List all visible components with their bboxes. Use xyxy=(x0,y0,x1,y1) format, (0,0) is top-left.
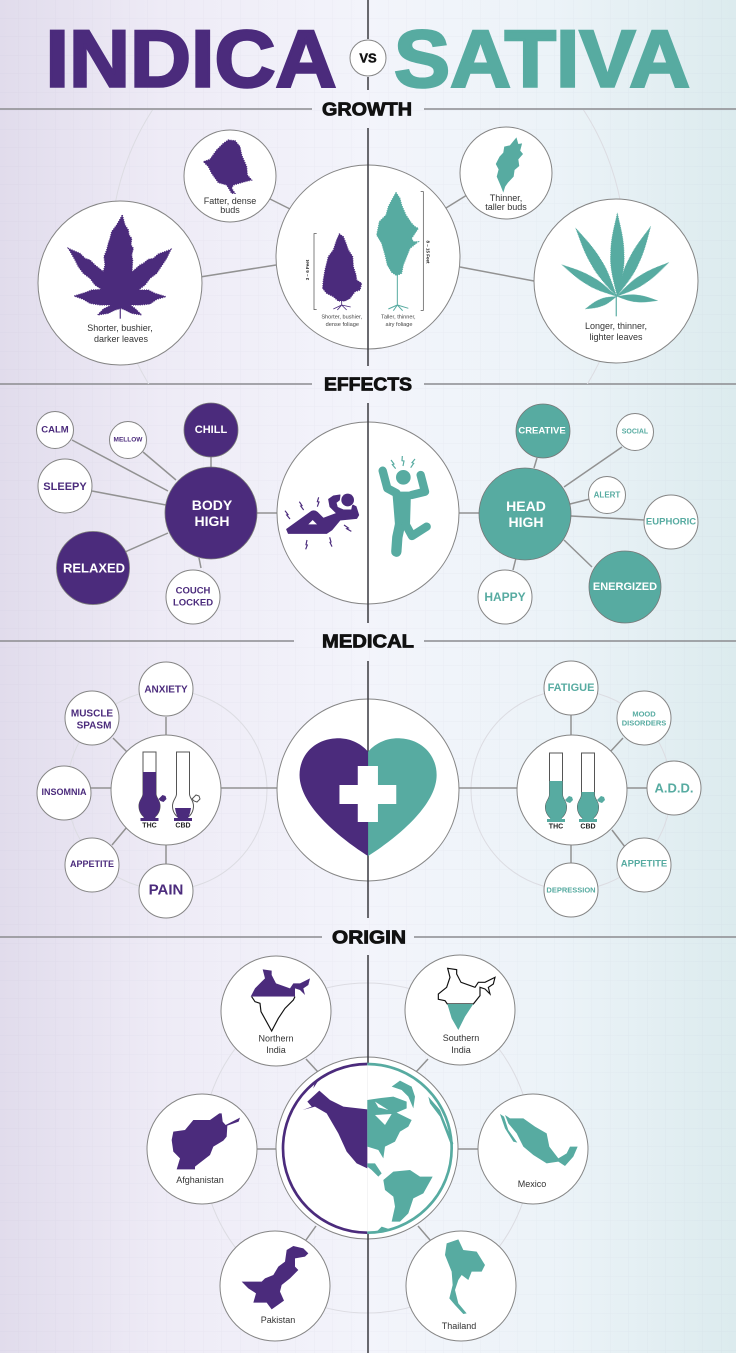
caption: Thailand xyxy=(442,1321,476,1331)
caption: thin buds: Thinner, xyxy=(490,193,522,203)
icon: sativa THC bong xyxy=(546,753,573,822)
caption: sativa leaves: Longer, thinner, xyxy=(585,321,647,331)
caption: Pakistan xyxy=(261,1315,295,1325)
label: CBD: CBD xyxy=(580,824,596,830)
node: mood disorders: MOOD xyxy=(632,710,656,718)
caption: thin buds xyxy=(485,193,527,212)
node: couch locked: LOCKED xyxy=(173,598,213,608)
icon: sativa CBD bong xyxy=(578,753,605,822)
node: social: SOCIAL xyxy=(622,428,649,436)
node: insomnia xyxy=(37,766,91,820)
node: relaxed xyxy=(56,532,130,604)
node: energized: ENERGIZED xyxy=(593,581,657,593)
connector lines: effects xyxy=(72,440,644,570)
icon: pakistan map xyxy=(242,1246,308,1309)
node: creative xyxy=(516,404,570,458)
panel: medical center circle xyxy=(277,699,459,881)
panel: body high cluster xyxy=(36,403,257,624)
node: muscle spasm: SPASM xyxy=(77,720,111,732)
heading: growth: GROWTH xyxy=(322,98,412,120)
icon: sativa plant: 8 – 15 Feet xyxy=(426,240,430,264)
icon: afghanistan map xyxy=(172,1113,240,1169)
node: social xyxy=(616,414,654,450)
caption: thin buds: taller buds xyxy=(485,202,527,212)
node: anxiety xyxy=(139,662,193,716)
node: add xyxy=(647,761,701,815)
vs badge xyxy=(350,40,386,76)
node: happy: HAPPY xyxy=(484,590,526,604)
icon: southern india map xyxy=(438,968,495,1030)
caption: indica leaves: Shorter, bushier, xyxy=(87,323,153,333)
icon: sativa leaf xyxy=(560,213,671,316)
icon: globe xyxy=(283,1064,453,1233)
icon: mexico map xyxy=(500,1114,578,1166)
node: pain: PAIN xyxy=(149,882,183,898)
node: head high: HIGH xyxy=(508,514,544,530)
icon: indica plant: dense foliage xyxy=(326,322,359,328)
heading: effects: EFFECTS xyxy=(324,374,412,394)
node: appetite xyxy=(65,838,119,892)
node: mood disorders xyxy=(617,691,671,745)
node: mellow: MELLOW xyxy=(114,436,143,444)
title: SATIVA: SATIVA xyxy=(394,14,690,104)
node: couch locked xyxy=(166,570,220,624)
icon: indica plant: Shorter, bushier, xyxy=(321,315,363,321)
heading: origin: ORIGIN xyxy=(332,926,406,948)
connector lines: growth xyxy=(200,195,534,281)
icon: heart with cross xyxy=(300,738,437,856)
node: sleepy xyxy=(38,459,92,513)
label: CBD: CBD xyxy=(175,822,191,830)
node: depression xyxy=(544,863,598,917)
panel: origin globe outer circle xyxy=(276,1057,458,1239)
panel: pakistan xyxy=(220,1231,330,1341)
center vertical line xyxy=(367,0,369,1353)
node: insomnia: INSOMNIA xyxy=(42,787,87,797)
node: chill: CHILL xyxy=(195,424,227,436)
hub: indica bongs xyxy=(111,735,221,845)
vs badge: VS xyxy=(359,50,377,66)
panel: indica medical cluster xyxy=(37,662,221,918)
node: energized xyxy=(589,551,661,623)
section divider lines xyxy=(0,109,736,937)
node: appetite xyxy=(617,838,671,892)
icon: thailand map xyxy=(445,1239,485,1314)
icon: northern india map xyxy=(251,969,310,1031)
panel: southern india xyxy=(405,955,515,1065)
icon: indica THC bong xyxy=(139,752,166,821)
panel: afghanistan xyxy=(147,1094,257,1204)
icon: sativa plant: airy foliage xyxy=(385,322,413,328)
connector lines: medical xyxy=(91,715,647,865)
caption: India xyxy=(451,1045,471,1055)
caption: Southern xyxy=(443,1033,479,1043)
node: pain xyxy=(139,864,193,918)
panel: thailand xyxy=(406,1231,516,1341)
panel: effects center circle xyxy=(277,422,459,604)
title: INDICA: INDICA xyxy=(46,14,336,104)
node: alert xyxy=(588,476,626,514)
panel: indica buds xyxy=(184,130,276,222)
label: THC: THC xyxy=(142,822,157,830)
node: mood disorders: DISORDERS xyxy=(622,718,666,728)
icon: fat bud xyxy=(203,140,252,193)
icon: person lying down xyxy=(285,493,359,549)
caption: Mexico xyxy=(518,1179,546,1189)
node: euphoric xyxy=(644,495,698,549)
caption: Afghanistan xyxy=(176,1175,224,1185)
icon: indica plant xyxy=(305,234,363,328)
caption xyxy=(258,1034,294,1055)
icon: indica leaf xyxy=(68,215,171,319)
node: chill xyxy=(184,403,238,457)
caption xyxy=(443,1033,479,1055)
icon: person energized xyxy=(383,456,427,552)
faint orbit rings xyxy=(67,0,671,1313)
node: fatigue: FATIGUE xyxy=(548,682,594,694)
icon: indica CBD bong xyxy=(172,752,200,821)
node: appetite: APPETITE xyxy=(621,858,667,870)
node: add: A.D.D. xyxy=(654,780,694,796)
panel: sativa buds xyxy=(460,127,552,219)
panel: northern india xyxy=(221,956,331,1066)
node: fatigue xyxy=(544,661,598,715)
node: creative: CREATIVE xyxy=(518,426,566,436)
caption: sativa leaves xyxy=(585,321,647,342)
connector lines: origin xyxy=(257,1059,478,1240)
node: body high: BODY xyxy=(192,497,233,513)
node: mellow xyxy=(110,422,146,458)
node: couch locked: COUCH xyxy=(176,586,211,596)
hub: sativa bongs xyxy=(517,735,627,845)
node: calm: CALM xyxy=(41,424,69,436)
icon: indica plant: 3 – 6 Feet xyxy=(305,259,310,280)
icon: thin bud xyxy=(496,137,523,193)
node: alert: ALERT xyxy=(594,490,620,500)
caption: India xyxy=(266,1045,286,1055)
node: head high xyxy=(479,468,571,560)
caption: buds: buds xyxy=(220,205,240,215)
caption: sativa leaves: lighter leaves xyxy=(589,332,643,342)
label: THC: THC xyxy=(549,824,563,830)
node: appetite: APPETITE xyxy=(70,859,114,869)
node: sleepy: SLEEPY xyxy=(43,481,87,493)
caption: buds: Fatter, dense xyxy=(204,196,256,206)
panel: head high cluster xyxy=(478,404,698,624)
node: happy xyxy=(478,570,532,624)
panel: sativa medical cluster xyxy=(517,661,701,917)
panel: growth center circle xyxy=(276,165,460,349)
node: muscle spasm xyxy=(65,691,119,745)
node: euphoric: EUPHORIC xyxy=(646,516,696,528)
icon: sativa plant: Taller, thinner, xyxy=(381,315,416,321)
node: calm xyxy=(36,412,74,448)
node: relaxed: RELAXED xyxy=(63,560,125,576)
node: head high: HEAD xyxy=(506,498,546,514)
node: anxiety: ANXIETY xyxy=(144,684,188,696)
panel: mexico xyxy=(478,1094,588,1204)
caption: indica leaves: darker leaves xyxy=(94,334,149,344)
node: depression: DEPRESSION xyxy=(546,886,596,894)
node: body high xyxy=(165,467,257,559)
heading: medical: MEDICAL xyxy=(322,630,414,652)
panel: indica leaf xyxy=(38,201,202,365)
node: muscle spasm: MUSCLE xyxy=(71,708,113,720)
caption: Northern xyxy=(258,1034,294,1044)
node: body high: HIGH xyxy=(194,513,230,529)
panel: sativa leaf xyxy=(534,199,698,363)
caption: indica leaves xyxy=(87,323,153,344)
caption: buds xyxy=(204,196,256,215)
icon: sativa plant xyxy=(377,192,430,328)
